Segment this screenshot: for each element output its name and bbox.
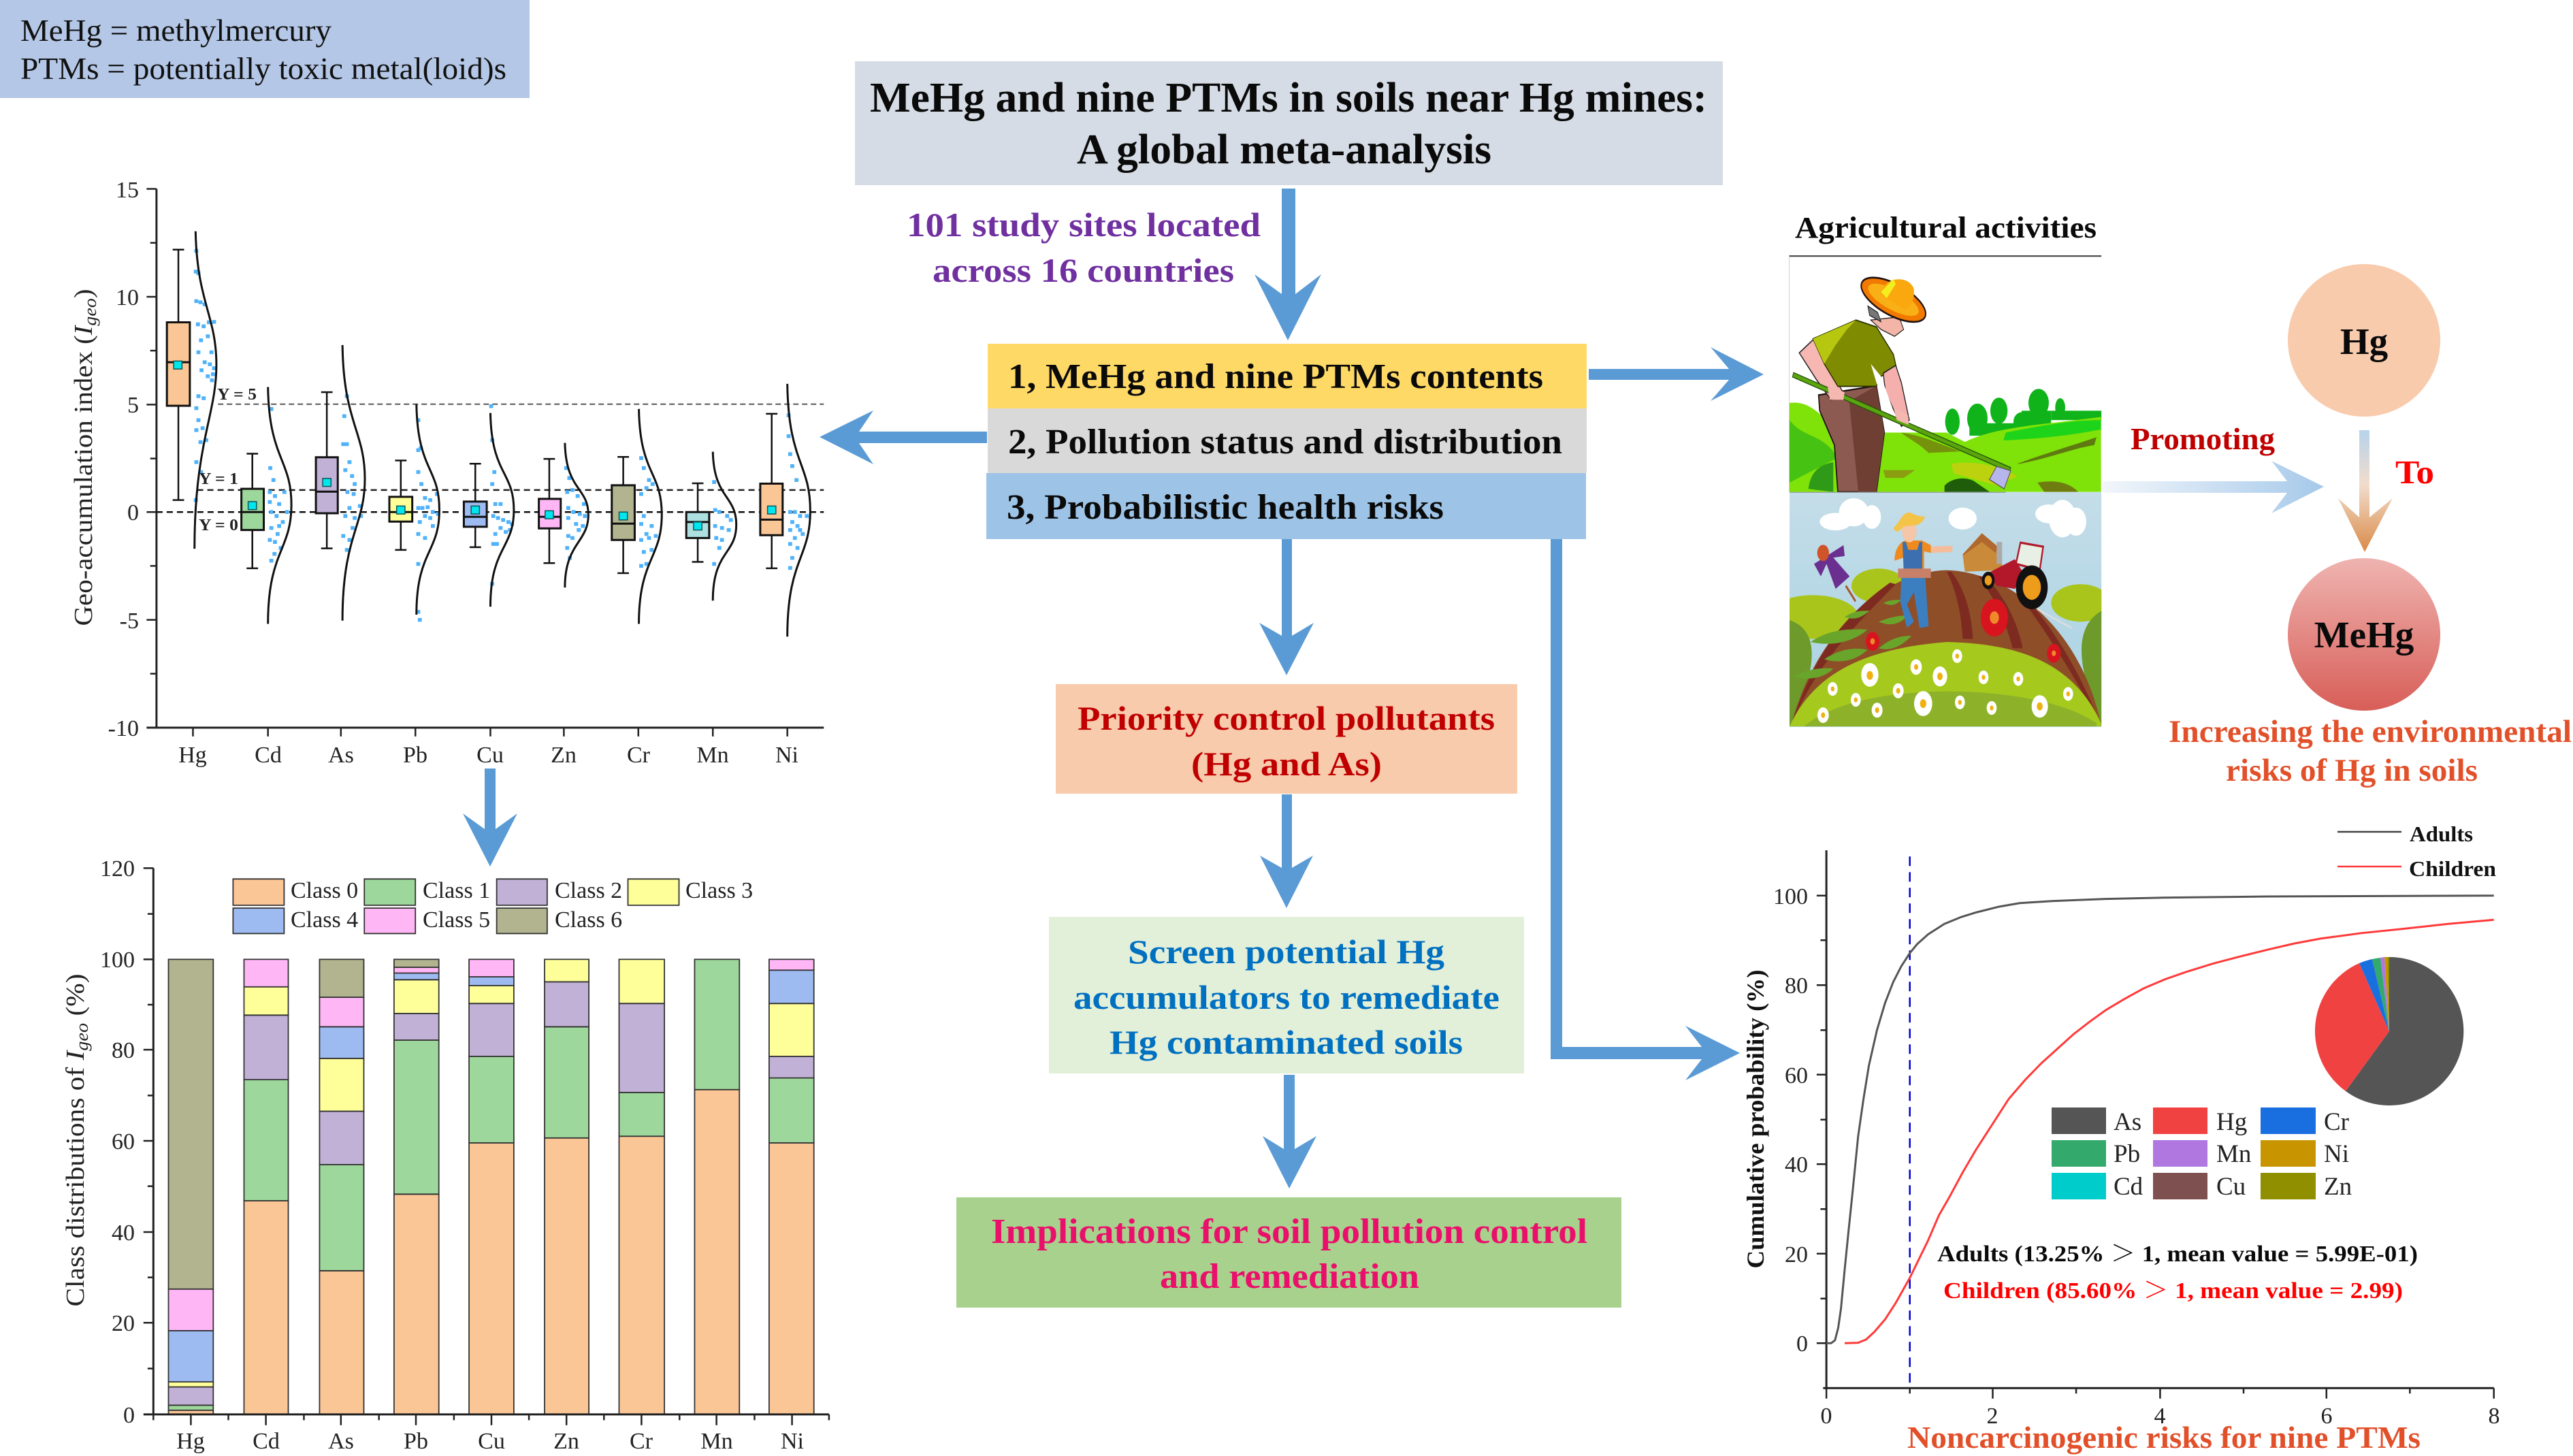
title box bbox=[855, 61, 1723, 185]
arrow: box plot to stacked bars bbox=[463, 769, 517, 867]
adults and children line legend: Adults bbox=[2410, 822, 2473, 846]
pie legend: Cu bbox=[2216, 1173, 2246, 1201]
y tick labels: 80 bbox=[1785, 973, 1808, 999]
item 1: contents: 1, MeHg and nine PTMs contents bbox=[1008, 357, 1543, 396]
environmental risks caption bbox=[2169, 714, 2572, 788]
illustration: agricultural activities bbox=[1768, 256, 2110, 727]
y axis title: geo bbox=[72, 1023, 92, 1051]
scarecrow bbox=[1814, 545, 1856, 601]
y tick labels: 20 bbox=[112, 1311, 135, 1336]
y tick labels: 60 bbox=[112, 1129, 135, 1154]
arrow: title to contents bbox=[1255, 189, 1321, 340]
x tick labels bbox=[1820, 1404, 2499, 1429]
illustration: farmer hoeing bbox=[1789, 256, 2101, 492]
x tick labels bbox=[176, 1429, 804, 1454]
x tick labels: Zn bbox=[553, 1429, 579, 1454]
y tick labels: 15 bbox=[116, 178, 139, 203]
x tick labels: Cr bbox=[630, 1429, 653, 1454]
reference line labels: Y = 0 bbox=[199, 517, 238, 534]
x tick labels: Cu bbox=[476, 743, 504, 768]
y axis title: Geo-accumulation index (I bbox=[69, 327, 98, 626]
x tick labels: 0 bbox=[1820, 1404, 1832, 1429]
y tick labels: 40 bbox=[112, 1220, 135, 1246]
x tick labels: Pb bbox=[404, 1429, 428, 1454]
y axis title: geo bbox=[80, 298, 100, 326]
x tick labels bbox=[178, 743, 798, 768]
x tick labels: 6 bbox=[2321, 1404, 2332, 1429]
item 2: pollution status bbox=[988, 408, 1587, 473]
y tick labels: 0 bbox=[123, 1403, 135, 1428]
study sites text: across 16 countries bbox=[933, 251, 1234, 289]
y tick labels: 100 bbox=[1773, 884, 1808, 909]
x tick labels: Mn bbox=[700, 1429, 733, 1454]
plot area bbox=[146, 189, 824, 737]
red flowers bbox=[1866, 599, 2060, 662]
x tick labels: Zn bbox=[551, 743, 577, 768]
x tick labels: Cu bbox=[478, 1429, 505, 1454]
item 3: health risks: 3, Probabilistic health risks bbox=[1007, 488, 1444, 527]
pie legend bbox=[2052, 1107, 2352, 1201]
y tick labels: 100 bbox=[100, 948, 135, 973]
x tick labels: Pb bbox=[403, 743, 427, 768]
pie legend: Cr bbox=[2324, 1108, 2349, 1136]
legend labels: Class 2 bbox=[555, 878, 622, 903]
x tick labels: 2 bbox=[1986, 1404, 1998, 1429]
agricultural activities heading: Agricultural activities bbox=[1795, 211, 2097, 244]
environmental risks caption: risks of Hg in soils bbox=[2226, 753, 2478, 788]
x axis title: Noncarcinogenic risks for nine PTMs bbox=[1907, 1420, 2421, 1455]
y tick labels: 80 bbox=[112, 1038, 135, 1063]
item 2: pollution status: 2, Pollution status and distribution bbox=[1008, 423, 1562, 462]
y tick labels: -10 bbox=[108, 716, 139, 741]
legend labels: Class 5 bbox=[423, 907, 490, 933]
y tick labels: 40 bbox=[1785, 1152, 1808, 1178]
reference line labels: Y = 1 bbox=[199, 470, 238, 488]
y axis title: (%) bbox=[61, 973, 90, 1023]
y tick labels bbox=[1773, 884, 1808, 1357]
circle: Hg bbox=[2288, 264, 2440, 417]
y tick labels: 120 bbox=[100, 856, 135, 881]
legend labels bbox=[291, 878, 753, 933]
pie legend: Pb bbox=[2114, 1140, 2140, 1168]
arrow: pollution status to Igeo chart bbox=[820, 410, 987, 464]
y tick labels: 60 bbox=[1785, 1063, 1808, 1088]
x tick labels: Cd bbox=[255, 743, 282, 768]
y tick labels: 5 bbox=[127, 393, 139, 418]
y tick labels: 20 bbox=[1785, 1242, 1808, 1267]
reference line labels bbox=[199, 386, 257, 534]
legend labels: Class 6 bbox=[555, 907, 622, 933]
chart: class distributions stacked bars bbox=[61, 856, 829, 1454]
arrow: screening to implications bbox=[1263, 1075, 1316, 1188]
x tick labels: 8 bbox=[2489, 1404, 2499, 1429]
title box: MeHg and nine PTMs in soils near Hg mines: bbox=[870, 75, 1707, 121]
barn bbox=[1962, 533, 2003, 572]
arrow: health risks elbow to risk chart bbox=[1551, 539, 1740, 1080]
y tick labels bbox=[100, 856, 135, 1428]
arrow: Hg to MeHg bbox=[2338, 430, 2393, 552]
study sites text bbox=[907, 206, 1261, 289]
screen accumulators box: Screen potential Hg bbox=[1128, 933, 1444, 971]
x tick labels: Ni bbox=[781, 1429, 804, 1454]
illustration: farm hill scene bbox=[1768, 492, 2110, 727]
item 3: health risks bbox=[986, 473, 1586, 539]
reference line labels: Y = 5 bbox=[217, 386, 257, 404]
x tick labels: Cd bbox=[253, 1429, 280, 1454]
x tick labels: Cr bbox=[627, 743, 651, 768]
pie legend: Cd bbox=[2114, 1173, 2143, 1201]
environmental risks caption: Increasing the environmental bbox=[2169, 714, 2572, 749]
x tick labels: As bbox=[328, 1429, 354, 1454]
plot lines bbox=[1817, 850, 2494, 1399]
y axis title: ) bbox=[69, 289, 98, 298]
pie legend: As bbox=[2114, 1108, 2141, 1136]
pie legend: Mn bbox=[2216, 1140, 2251, 1168]
y tick labels: -5 bbox=[120, 609, 139, 634]
y tick labels bbox=[108, 178, 139, 741]
legend labels: Class 0 bbox=[291, 878, 358, 903]
x tick labels: Hg bbox=[178, 743, 207, 768]
y tick labels: 10 bbox=[116, 285, 139, 310]
adults and children line legend: Children bbox=[2409, 856, 2496, 881]
y tick labels: 0 bbox=[1796, 1331, 1808, 1357]
abbreviation legend box: PTMs = potentially toxic metal(loid)s bbox=[20, 51, 506, 86]
circle: MeHg bbox=[2288, 558, 2440, 711]
pie chart: element contributions bbox=[2315, 957, 2463, 1105]
to label: To bbox=[2395, 453, 2434, 491]
abbreviation legend box bbox=[0, 0, 530, 98]
legend labels: Class 1 bbox=[423, 878, 490, 903]
x tick labels: Mn bbox=[696, 743, 729, 768]
item 1: contents bbox=[988, 344, 1587, 408]
x tick labels: Hg bbox=[176, 1429, 205, 1454]
study sites text: 101 study sites located bbox=[907, 206, 1261, 244]
arrow: priority to screening bbox=[1260, 794, 1313, 908]
chart: cumulative probability of noncarcinogenic risk bbox=[1742, 822, 2499, 1455]
abbreviation legend box: MeHg = methylmercury bbox=[20, 13, 331, 48]
pie legend: Hg bbox=[2216, 1108, 2247, 1136]
x tick labels: As bbox=[328, 743, 354, 768]
screen accumulators box bbox=[1049, 917, 1524, 1073]
priority control pollutants box: Priority control pollutants bbox=[1078, 699, 1495, 737]
y tick labels: 0 bbox=[127, 500, 139, 525]
arrow: health risks to priority pollutants bbox=[1259, 539, 1314, 675]
panel: research contents list bbox=[986, 344, 1587, 539]
screen accumulators box: Hg contaminated soils bbox=[1110, 1023, 1463, 1061]
priority control pollutants box: (Hg and As) bbox=[1191, 745, 1382, 783]
tractor bbox=[1982, 542, 2071, 628]
arrow: promoting gradient arrow bbox=[2103, 461, 2324, 513]
small white flowers bbox=[1817, 649, 2073, 723]
adults and children line legend bbox=[2337, 822, 2496, 881]
pie legend: Ni bbox=[2324, 1140, 2349, 1168]
y axis title: Cumulative probability (%) bbox=[1742, 969, 1769, 1269]
title box: A global meta-analysis bbox=[1077, 127, 1491, 173]
circle: Hg: Hg bbox=[2340, 321, 2388, 362]
y axis title: Class distributions of I bbox=[61, 1052, 90, 1307]
x tick labels: 4 bbox=[2154, 1404, 2166, 1429]
adults risk annotation: Adults (13.25% ＞ 1, mean value = 5.99E-01) bbox=[1937, 1242, 2418, 1267]
implications box: Implications for soil pollution control bbox=[991, 1212, 1587, 1251]
chart: geo-accumulation index box plot bbox=[69, 178, 824, 768]
screen accumulators box: accumulators to remediate bbox=[1073, 978, 1500, 1016]
bars and axes bbox=[144, 868, 829, 1425]
circle: MeHg: MeHg bbox=[2314, 614, 2414, 656]
arrow: contents to agricultural activities bbox=[1589, 347, 1764, 401]
farmer with overalls bbox=[1894, 513, 1952, 628]
x tick labels: Ni bbox=[775, 743, 798, 768]
children risk annotation: Children (85.60% ＞ 1, mean value = 2.99) bbox=[1943, 1278, 2403, 1304]
promoting label: Promoting bbox=[2131, 421, 2275, 456]
legend labels: Class 4 bbox=[291, 907, 358, 933]
legend labels: Class 3 bbox=[685, 878, 753, 903]
implications box bbox=[956, 1197, 1621, 1308]
priority control pollutants box bbox=[1056, 684, 1517, 794]
implications box: and remediation bbox=[1160, 1257, 1419, 1296]
pie legend: Zn bbox=[2324, 1173, 2352, 1201]
